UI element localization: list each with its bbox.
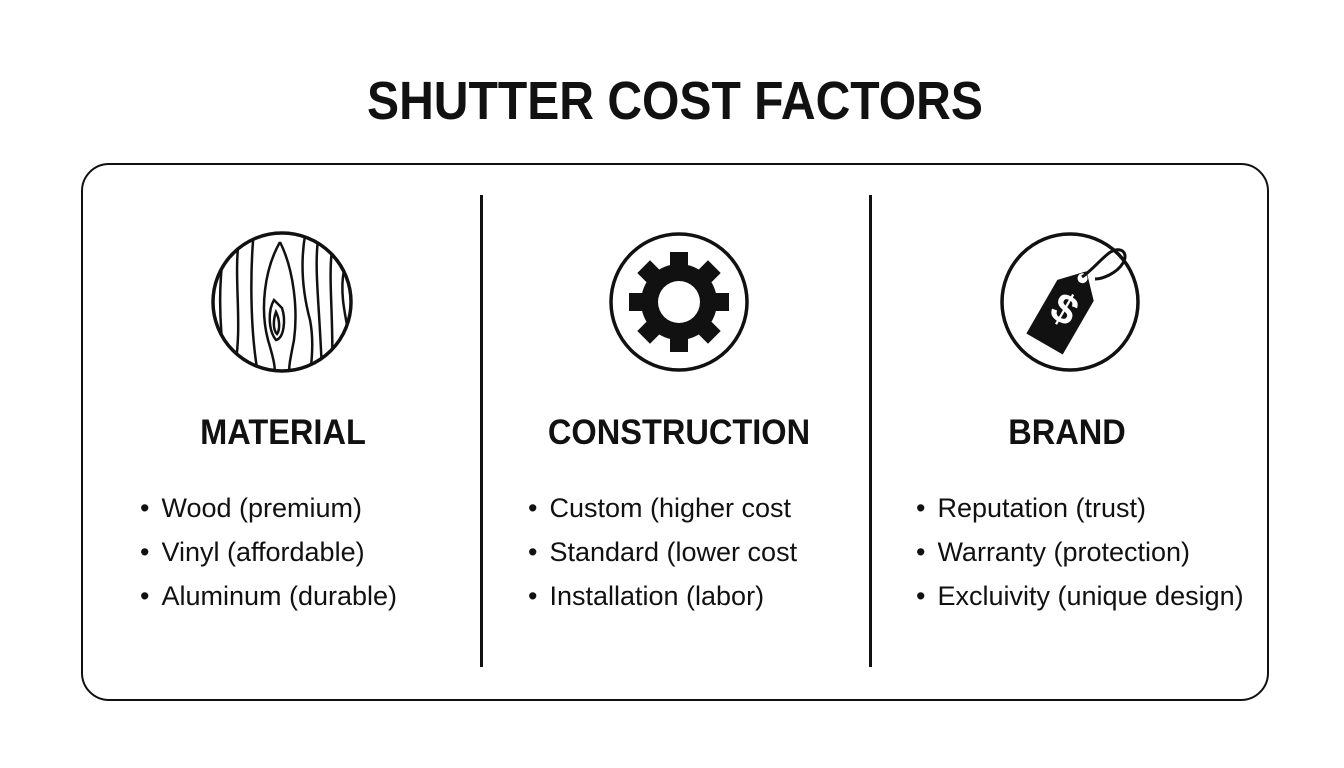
title: SHUTTER COST FACTORS [367, 71, 983, 131]
list: brand: Reputation (trust) [937, 493, 1146, 523]
list: construction: Custom (higher cost [549, 493, 791, 523]
list: brand [917, 493, 1244, 611]
list: construction [529, 493, 797, 611]
list: material: Aluminum (durable) [161, 581, 397, 611]
icon: gear [609, 232, 749, 372]
list: material [141, 493, 397, 611]
list: construction: Standard (lower cost [549, 537, 797, 567]
panel container [81, 163, 1269, 701]
icon: price tag: $ [1043, 283, 1087, 335]
heading: material: MATERIAL [200, 413, 366, 452]
heading: brand: BRAND [1008, 413, 1126, 452]
list: material: Wood (premium) [161, 493, 362, 523]
icon: price tag [1000, 232, 1140, 372]
list: construction: Installation (labor) [549, 581, 764, 611]
icon: wood [211, 231, 353, 373]
list: brand: Warranty (protection) [937, 537, 1190, 567]
list: material: Vinyl (affordable) [161, 537, 365, 567]
list: brand: Excluivity (unique design) [937, 581, 1244, 611]
heading: construction: CONSTRUCTION [548, 413, 810, 452]
